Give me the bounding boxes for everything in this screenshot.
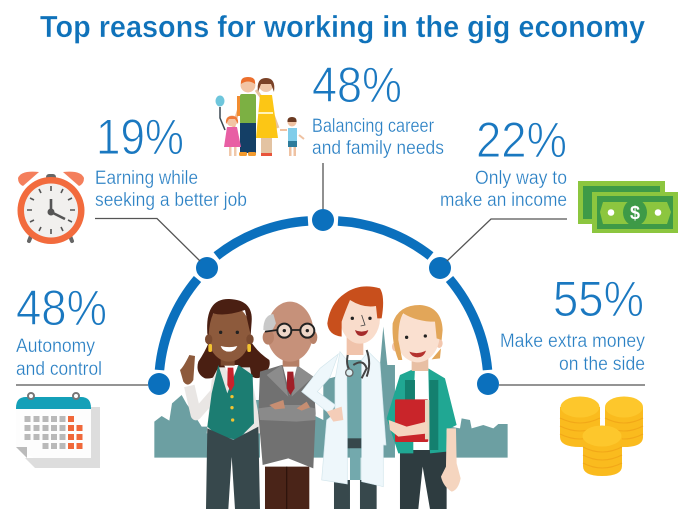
person: older man in grey suit xyxy=(258,302,317,509)
stat: 55% extra money: 55% xyxy=(553,271,644,327)
stat: 55% extra money xyxy=(500,271,645,375)
icon: alarm clock xyxy=(18,172,84,244)
people illustration xyxy=(180,286,461,509)
stat: 48% career and family: Balancing career xyxy=(312,116,435,137)
stat: 19% better job: Earning while xyxy=(95,168,198,189)
stat: 55% extra money: Make extra money xyxy=(500,331,645,352)
stat: 48% career and family xyxy=(312,57,444,159)
stat: 48% autonomy: Autonomy xyxy=(16,336,95,357)
stat: 19% better job xyxy=(95,109,247,211)
stat: 22% only income: Only way to xyxy=(475,168,567,189)
icon: family xyxy=(216,77,304,156)
icon: banknotes xyxy=(578,181,678,233)
stat: 48% career and family: and family needs xyxy=(312,138,444,159)
stat: 19% better job: seeking a better job xyxy=(95,190,247,211)
icon: banknotes: $ xyxy=(630,203,640,223)
stat: 19% better job: 19% xyxy=(96,109,184,165)
stat: 22% only income: 22% xyxy=(476,112,567,168)
stat: 48% autonomy xyxy=(16,280,107,380)
city skyline xyxy=(154,327,508,458)
icon: calendar xyxy=(16,393,100,468)
person: woman in green vest xyxy=(180,299,270,509)
person: young man with book xyxy=(387,305,461,509)
stat: 48% autonomy: 48% xyxy=(16,280,107,336)
stat: 55% extra money: on the side xyxy=(559,354,645,375)
stat: 22% only income: make an income xyxy=(440,190,567,211)
stat: 48% autonomy: and control xyxy=(16,359,102,380)
stat: 22% only income xyxy=(440,112,567,211)
icon: coin stacks xyxy=(560,396,643,476)
person: doctor xyxy=(302,286,386,509)
title: Top reasons for working in the gig economy xyxy=(40,9,646,44)
arc with connector nodes xyxy=(16,163,645,395)
stat: 48% career and family: 48% xyxy=(312,57,402,113)
